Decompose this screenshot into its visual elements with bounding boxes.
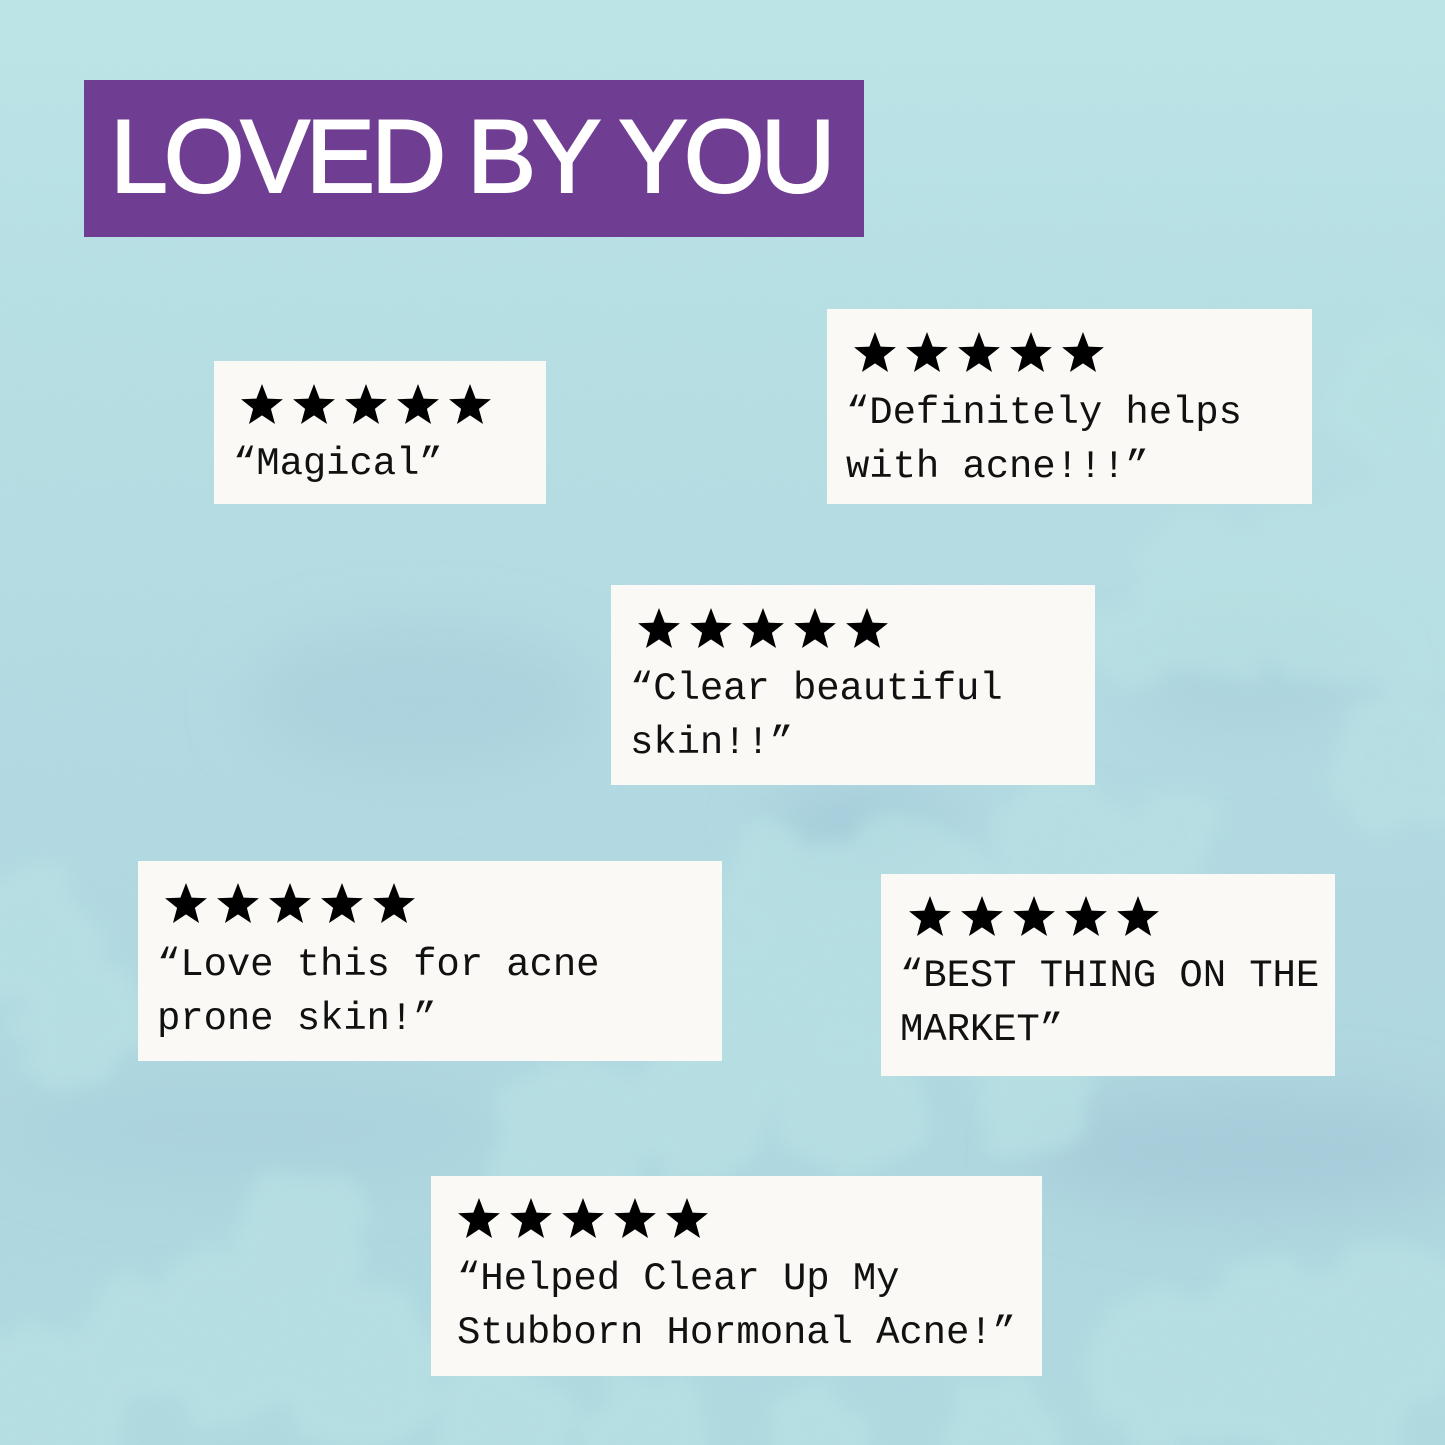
icon: five stars [638,608,888,648]
review text: “Love this for acne prone skin!” [157,943,599,1041]
review text: “Definitely helps with acne!!!” [846,391,1242,489]
review text: “Clear beautiful skin!!” [630,667,1003,765]
icon: five stars [909,896,1159,936]
review text: “Helped Clear Up My Stubborn Hormonal Acne!” [457,1257,1016,1355]
panel: review Magical [214,361,546,504]
icon: five stars [854,332,1104,372]
panel: review Love this [138,861,722,1061]
title: LOVED BY YOU [110,99,832,215]
icon: five stars [165,883,415,923]
review text: “Magical” [233,442,443,486]
title banner [84,80,864,237]
panel: review Best thing [881,874,1335,1076]
icon: five stars [241,384,491,424]
panel: review Helped clear [431,1176,1042,1376]
icon: five stars [458,1198,708,1238]
review text: “BEST THING ON THE MARKET” [900,954,1319,1052]
panel: review Definitely helps [827,309,1312,504]
panel: review Clear beautiful [611,585,1095,785]
